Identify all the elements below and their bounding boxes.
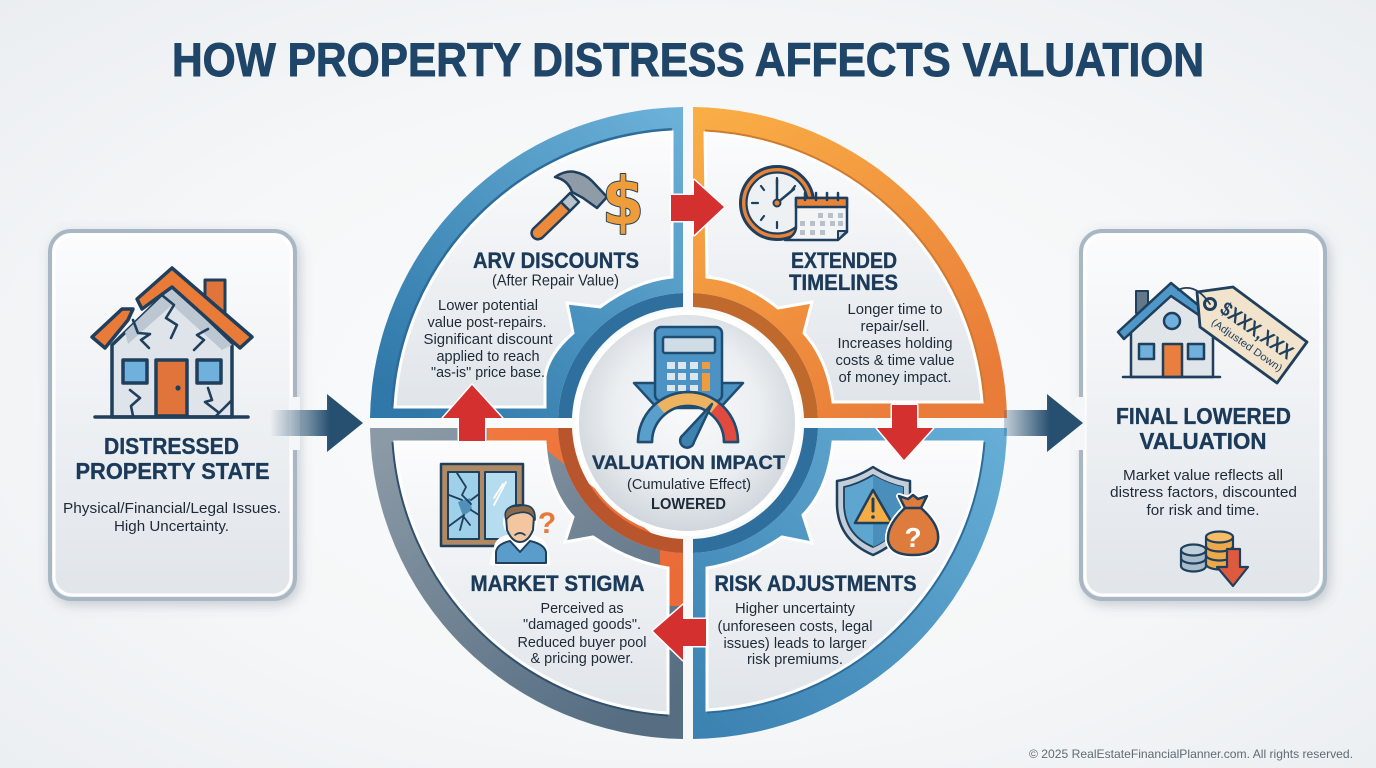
footer copyright: © 2025 RealEstateFinancialPlanner.com. All rights reserved. bbox=[1029, 747, 1353, 761]
icon: broken window and worried person bbox=[441, 464, 556, 563]
text: distressed description: High Uncertainty. bbox=[114, 518, 229, 535]
arrow: distressed state into cycle bbox=[270, 394, 363, 452]
icon: coins with down arrow bbox=[1181, 532, 1248, 586]
text: market stigma: MARKET STIGMA bbox=[470, 571, 645, 596]
icon: broken window and worried person: ? bbox=[538, 507, 556, 540]
text: distressed description bbox=[63, 500, 281, 535]
icon: hammer and dollar: $ bbox=[602, 163, 644, 240]
text: extended timelines: costs & time value bbox=[836, 352, 954, 369]
icon: shield and money bag bbox=[837, 467, 938, 555]
heading: final lowered valuation bbox=[1116, 403, 1291, 454]
text: extended timelines: Increases holding bbox=[838, 335, 952, 352]
text: ARV discounts: (After Repair Value) bbox=[492, 272, 619, 290]
text: ARV discounts: ARV DISCOUNTS bbox=[473, 248, 639, 273]
heading: final lowered valuation: FINAL LOWERED bbox=[1116, 403, 1291, 429]
text: ARV discounts bbox=[424, 248, 639, 381]
text: final description: Market value reflects all bbox=[1123, 467, 1283, 484]
icon: house with price tag bbox=[1118, 283, 1307, 383]
text: risk adjustments: Higher uncertainty bbox=[735, 600, 855, 617]
text: ARV discounts: Lower potential bbox=[438, 297, 538, 314]
icon: cracked house bbox=[92, 268, 252, 417]
text: extended timelines: TIMELINES bbox=[789, 270, 898, 295]
icon: hammer and dollar bbox=[532, 163, 644, 240]
quadrant: market stigma ring bbox=[370, 428, 683, 739]
text: market stigma: Reduced buyer pool bbox=[518, 634, 646, 651]
hub text: (Cumulative Effect) bbox=[627, 476, 751, 493]
text: risk adjustments: risk premiums. bbox=[747, 651, 843, 668]
text: final description bbox=[1110, 467, 1297, 519]
heading: final lowered valuation: VALUATION bbox=[1140, 428, 1266, 454]
text: ARV discounts: value post-repairs. bbox=[428, 314, 546, 331]
text: final description: distress factors, discounted bbox=[1110, 484, 1297, 501]
arrow: ARV to timelines bbox=[671, 180, 724, 235]
icon: shield and money bag: ? bbox=[904, 522, 922, 553]
icon: calculator with gauge bbox=[634, 327, 743, 448]
hub text: LOWERED bbox=[651, 496, 726, 513]
text: extended timelines bbox=[789, 248, 954, 386]
hub text bbox=[592, 452, 785, 513]
hub: valuation impact bbox=[574, 310, 800, 536]
text: ARV discounts: applied to reach bbox=[436, 348, 540, 365]
price tag text: $XXX,XXX bbox=[1216, 298, 1298, 365]
text: distressed description: Physical/Financial/Legal Issues. bbox=[63, 500, 281, 517]
text: extended timelines: repair/sell. bbox=[860, 318, 930, 335]
text: market stigma bbox=[470, 571, 646, 667]
arrow: stigma to ARV bbox=[443, 385, 502, 441]
text: market stigma: Perceived as bbox=[540, 600, 624, 617]
text: risk adjustments: RISK ADJUSTMENTS bbox=[714, 571, 916, 596]
text: extended timelines: EXTENDED bbox=[791, 248, 897, 273]
text: risk adjustments bbox=[714, 571, 916, 668]
arrow: timelines to risk bbox=[877, 405, 933, 460]
panel: distressed property state bbox=[50, 231, 300, 599]
text: ARV discounts: "as-is" price base. bbox=[431, 364, 545, 381]
hub text: VALUATION IMPACT bbox=[592, 452, 785, 474]
arrow: risk to stigma bbox=[653, 605, 706, 660]
text: final description: for risk and time. bbox=[1146, 502, 1260, 519]
text: risk adjustments: issues) leads to larger bbox=[724, 635, 867, 652]
text: extended timelines: of money impact. bbox=[838, 369, 952, 386]
heading: distressed property state: DISTRESSED bbox=[104, 433, 239, 459]
icon: clock and calendar bbox=[740, 166, 847, 240]
text: market stigma: "damaged goods". bbox=[523, 616, 641, 633]
heading: distressed property state bbox=[76, 433, 270, 484]
text: ARV discounts: Significant discount bbox=[424, 331, 553, 348]
quadrant: risk adjustments ring bbox=[693, 428, 1007, 739]
heading: distressed property state: PROPERTY STATE bbox=[76, 458, 270, 484]
text: extended timelines: Longer time to bbox=[848, 301, 942, 318]
quadrant: extended timelines ring bbox=[693, 107, 1007, 418]
text: risk adjustments: (unforeseen costs, legal bbox=[718, 618, 872, 635]
quadrant: ARV discounts ring bbox=[370, 107, 683, 418]
panel: final lowered valuation bbox=[1075, 231, 1325, 599]
price tag text: (Adjusted Down) bbox=[1209, 317, 1285, 375]
arrow: cycle to final valuation bbox=[1004, 394, 1083, 452]
title: HOW PROPERTY DISTRESS AFFECTS VALUATION bbox=[172, 33, 1204, 86]
text: market stigma: & pricing power. bbox=[530, 650, 634, 667]
